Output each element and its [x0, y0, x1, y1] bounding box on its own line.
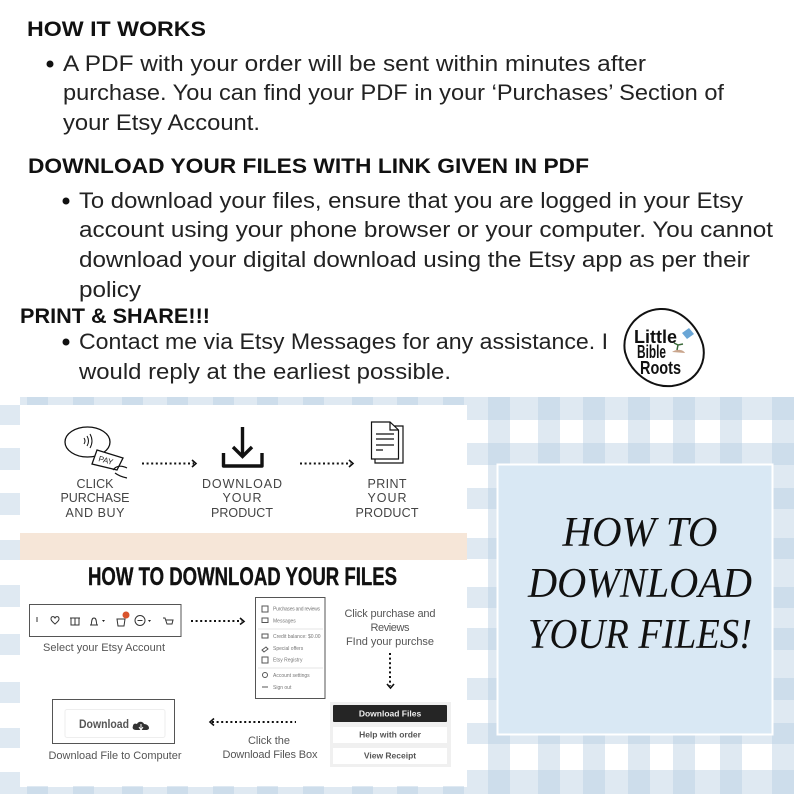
label: download your product: DOWNLOAD	[202, 477, 282, 491]
step 2: download your product: YOUR	[222, 491, 262, 505]
order buttons: View Receipt	[364, 750, 416, 760]
text block: download instructions	[62, 188, 773, 302]
heading: how to download your files: HOW TO DOWNLOAD YOUR FILES	[88, 563, 397, 591]
account menu: Special offers	[273, 646, 304, 652]
step 1: click purchase and buy	[60, 427, 130, 520]
text block: contact: Contact me via Etsy Messages for any assistance. I	[79, 329, 608, 354]
text block: contact	[62, 329, 608, 384]
account menu: Sign out	[273, 685, 292, 691]
title: how to download your files	[527, 510, 752, 658]
heading: how it works: HOW IT WORKS	[27, 18, 206, 41]
logo: Little Bible Roots: Little	[634, 327, 677, 347]
caption: click purchase and reviews: Reviews	[370, 622, 410, 634]
step 3: print your product: YOUR	[368, 491, 406, 505]
caption: download file to computer: Download File to Computer	[48, 750, 182, 762]
text block: contact: would reply at the earliest possible.	[78, 359, 451, 384]
title: how to download your files: HOW TO	[562, 510, 718, 556]
step 3: print your product	[356, 422, 419, 520]
order buttons	[330, 702, 451, 767]
text block: download instructions: To download your files, ensure that you are logged in your Etsy	[79, 188, 743, 213]
step 1: click purchase and buy: PURCHASE	[60, 491, 130, 505]
step 2: download your product	[202, 427, 282, 520]
peach band	[20, 533, 467, 560]
panel: steps and download guide	[20, 405, 467, 786]
step 1: click purchase and buy: AND BUY	[66, 506, 125, 520]
arrow: step 2 to 3	[300, 462, 351, 464]
arrow: buttons to download box	[212, 721, 296, 723]
text block: download instructions: download your digital download using the Etsy app as per their	[79, 247, 750, 272]
caption: click purchase and reviews: FInd your purchse	[346, 636, 434, 648]
caption: select your etsy account: Select your Etsy Account	[43, 642, 165, 654]
title card	[498, 464, 772, 734]
download button box: Download	[79, 719, 129, 731]
download button box	[52, 700, 174, 744]
logo: Little Bible Roots: Bible	[637, 342, 666, 362]
account toolbar	[30, 604, 181, 636]
account menu: Account settings	[273, 673, 310, 679]
step 3: print your product: PRODUCT	[356, 506, 419, 520]
logo: Little Bible Roots: Roots	[640, 358, 681, 378]
icon: payment card: PAY	[97, 454, 115, 467]
order buttons: Help with order	[359, 730, 422, 740]
icon: download	[224, 427, 262, 466]
text block: download instructions: account using your phone browser or your computer. You cannot	[79, 217, 773, 242]
step 2: download your product: PRODUCT	[211, 506, 273, 520]
arrow: toolbar to menu	[191, 620, 242, 622]
text block: how it works: A PDF with your order will be sent within minutes after	[63, 51, 646, 76]
icon: document	[372, 422, 403, 463]
arrow: step 1 to 2	[142, 462, 194, 464]
caption: click purchase and reviews	[344, 608, 436, 648]
logo: Little Bible Roots	[624, 309, 704, 386]
account menu: Purchases and reviews	[273, 606, 320, 612]
title: how to download your files: DOWNLOAD	[527, 561, 752, 607]
text block: how it works: your Etsy Account.	[63, 110, 260, 135]
title: how to download your files: YOUR FILES!	[528, 612, 752, 658]
heading: print and share: PRINT & SHARE!!!	[20, 305, 210, 328]
account menu: Credit balance: $0.00	[273, 634, 321, 640]
label: click purchase and buy: CLICK	[76, 477, 114, 491]
order buttons: Download Files	[359, 708, 421, 718]
account menu: Etsy Registry	[273, 658, 303, 664]
caption: click purchase and reviews: Click purchase and	[344, 608, 436, 620]
heading: download your files: DOWNLOAD YOUR FILES WITH LINK GIVEN IN PDF	[28, 155, 589, 178]
caption: click the download files box: Click the	[248, 735, 290, 747]
account menu: Messages	[273, 618, 296, 624]
arrow: caption down to buttons	[389, 653, 391, 686]
text block: how it works	[46, 51, 725, 135]
label: print your product: PRINT	[368, 477, 407, 491]
account menu	[256, 598, 325, 698]
text block: download instructions: policy	[79, 277, 141, 302]
caption: click the download files box	[222, 735, 318, 761]
gingham background	[0, 397, 794, 794]
caption: click the download files box: Download Files Box	[222, 749, 318, 761]
text block: how it works: purchase. You can find your PDF in your ‘Purchases’ Section of	[63, 80, 725, 105]
